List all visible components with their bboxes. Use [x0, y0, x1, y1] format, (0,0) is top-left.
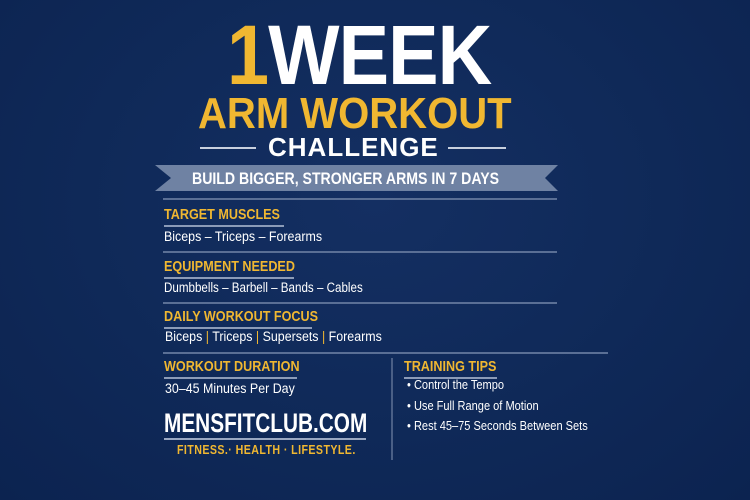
title: arm workout: ARM WORKOUT — [198, 89, 512, 138]
section: workout duration: 30–45 Minutes Per Day — [165, 381, 295, 396]
banner — [155, 165, 558, 191]
section: daily focus — [164, 308, 382, 344]
title: 1 week: 1WEEK — [227, 8, 491, 102]
section: workout duration: WORKOUT DURATION — [164, 358, 300, 375]
section: training tips — [404, 358, 588, 433]
section: equipment: EQUIPMENT NEEDED — [164, 258, 295, 275]
section: target muscles: Biceps – Triceps – Forearms — [164, 229, 322, 244]
title: challenge: CHALLENGE — [268, 132, 439, 162]
section: equipment — [164, 258, 363, 295]
banner: BUILD BIGGER, STRONGER ARMS IN 7 DAYS — [192, 169, 499, 188]
section: training tips: • Control the Tempo — [407, 377, 504, 392]
logo: FITNESS.· HEALTH · LIFESTYLE. — [177, 442, 356, 457]
section: daily focus: Biceps | Triceps | Supersets | Forearms — [165, 329, 382, 344]
section: target muscles — [164, 206, 322, 244]
section: training tips: TRAINING TIPS — [404, 358, 496, 375]
section: training tips: • Use Full Range of Motion — [407, 398, 539, 413]
section: workout duration — [164, 358, 300, 396]
logo — [164, 408, 367, 457]
logo: MENSFITCLUB.COM — [164, 408, 367, 438]
section: daily focus: DAILY WORKOUT FOCUS — [164, 308, 318, 325]
section: training tips: • Rest 45–75 Seconds Between Sets — [407, 418, 588, 433]
section: equipment: Dumbbells – Barbell – Bands – Cables — [164, 280, 363, 295]
section: target muscles: TARGET MUSCLES — [164, 206, 280, 223]
